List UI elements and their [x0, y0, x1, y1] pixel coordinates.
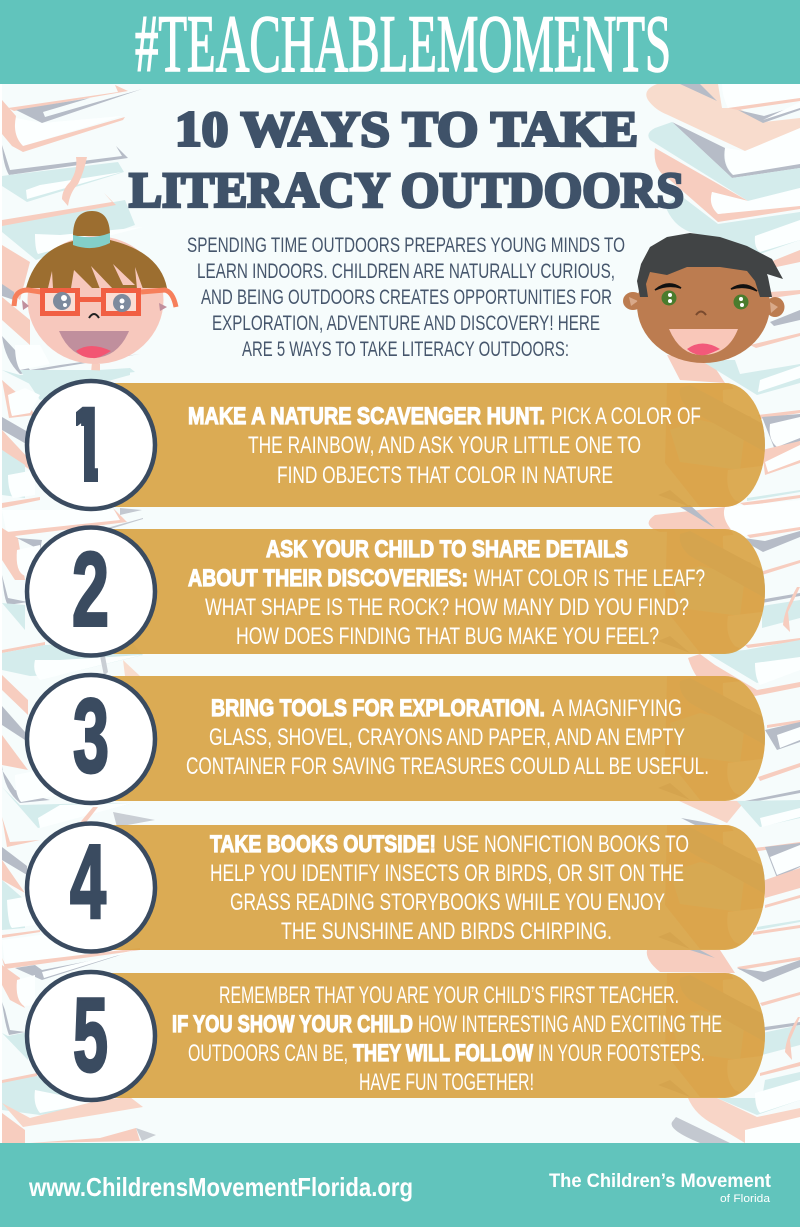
step 1 band	[110, 383, 765, 507]
intro text: ARE 5 WAYS TO TAKE LITERACY OUTDOORS:	[242, 338, 569, 361]
panel: step 4	[27, 824, 765, 952]
main title: LITERACY OUTDOORS	[129, 162, 684, 218]
step 1 text: THE RAINBOW, AND ASK YOUR LITTLE ONE TO	[248, 432, 641, 459]
icon: boy	[623, 233, 784, 363]
step 4 text: TAKE BOOKS OUTSIDE!	[210, 831, 436, 858]
step 1 text: MAKE A NATURE SCAVENGER HUNT.	[188, 403, 545, 430]
step 5 text: THEY WILL FOLLOW	[353, 1040, 534, 1067]
step 4 circle	[27, 824, 155, 952]
step 5 circle	[27, 972, 155, 1100]
step 5 text	[172, 982, 722, 1096]
step 1 number: 1	[63, 386, 109, 504]
step 1 circle	[27, 381, 155, 509]
step 4 number: 4	[70, 824, 106, 940]
step 2 band	[110, 529, 765, 654]
step 3 text: BRING TOOLS FOR EXPLORATION.	[211, 695, 545, 722]
step 3 text: A MAGNIFYING	[552, 695, 682, 722]
panel: step 5	[27, 972, 765, 1100]
step 3 text	[186, 695, 709, 780]
panel: step 1	[27, 381, 765, 509]
step 5 band	[110, 973, 765, 1098]
footer website: www.ChildrensMovementFlorida.org	[28, 1172, 413, 1202]
step 5 number: 5	[73, 977, 108, 1094]
step 2 number: 2	[72, 532, 109, 648]
step 4 text: THE SUNSHINE AND BIRDS CHIRPING.	[281, 918, 612, 945]
book shapes seen through the bands	[658, 383, 770, 1097]
icon: girl with glasses	[14, 211, 176, 364]
step 2 text	[188, 536, 705, 650]
step 2 text: ABOUT THEIR DISCOVERIES:	[188, 565, 468, 592]
step 2 text: ASK YOUR CHILD TO SHARE DETAILS	[266, 536, 628, 563]
main title	[129, 100, 684, 218]
step 1 text: FIND OBJECTS THAT COLOR IN NATURE	[277, 462, 613, 489]
footer logo: of Florida	[720, 1193, 771, 1205]
background books: right stack	[646, 84, 800, 1143]
step 3 circle	[27, 675, 155, 803]
step 5 text: IN YOUR FOOTSTEPS.	[538, 1040, 705, 1067]
step 5 text: IF YOU SHOW YOUR CHILD	[172, 1011, 413, 1038]
footer band	[0, 1143, 800, 1227]
intro text: SPENDING TIME OUTDOORS PREPARES YOUNG MINDS TO	[187, 234, 625, 257]
intro text: EXPLORATION, ADVENTURE AND DISCOVERY! HERE	[212, 312, 600, 335]
step 4 text: USE NONFICTION BOOKS TO	[443, 831, 689, 858]
step 2 circle	[27, 528, 155, 656]
step 5 text: HAVE FUN TOGETHER!	[359, 1069, 534, 1096]
panel: step 2	[27, 528, 765, 656]
background books: left stack	[0, 84, 156, 1144]
step 2 text: WHAT COLOR IS THE LEAF?	[474, 565, 705, 592]
intro text	[187, 234, 625, 361]
step 1 text	[188, 403, 701, 489]
main title: 10 WAYS TO TAKE	[175, 100, 638, 156]
panel: step 3	[27, 675, 765, 803]
footer logo: The Children’s Movement	[549, 1171, 772, 1192]
header band	[0, 0, 800, 84]
step 4 text	[210, 831, 689, 945]
step 5 text: OUTDOORS CAN BE,	[188, 1040, 348, 1067]
intro text: AND BEING OUTDOORS CREATES OPPORTUNITIES FOR	[201, 286, 612, 309]
footer logo	[549, 1171, 772, 1205]
step 4 band	[110, 825, 765, 950]
step 3 band	[110, 676, 765, 801]
intro text: LEARN INDOORS. CHILDREN ARE NATURALLY CURIOUS,	[197, 260, 615, 283]
step 3 number: 3	[73, 678, 109, 795]
step 1 text: PICK A COLOR OF	[551, 403, 701, 430]
